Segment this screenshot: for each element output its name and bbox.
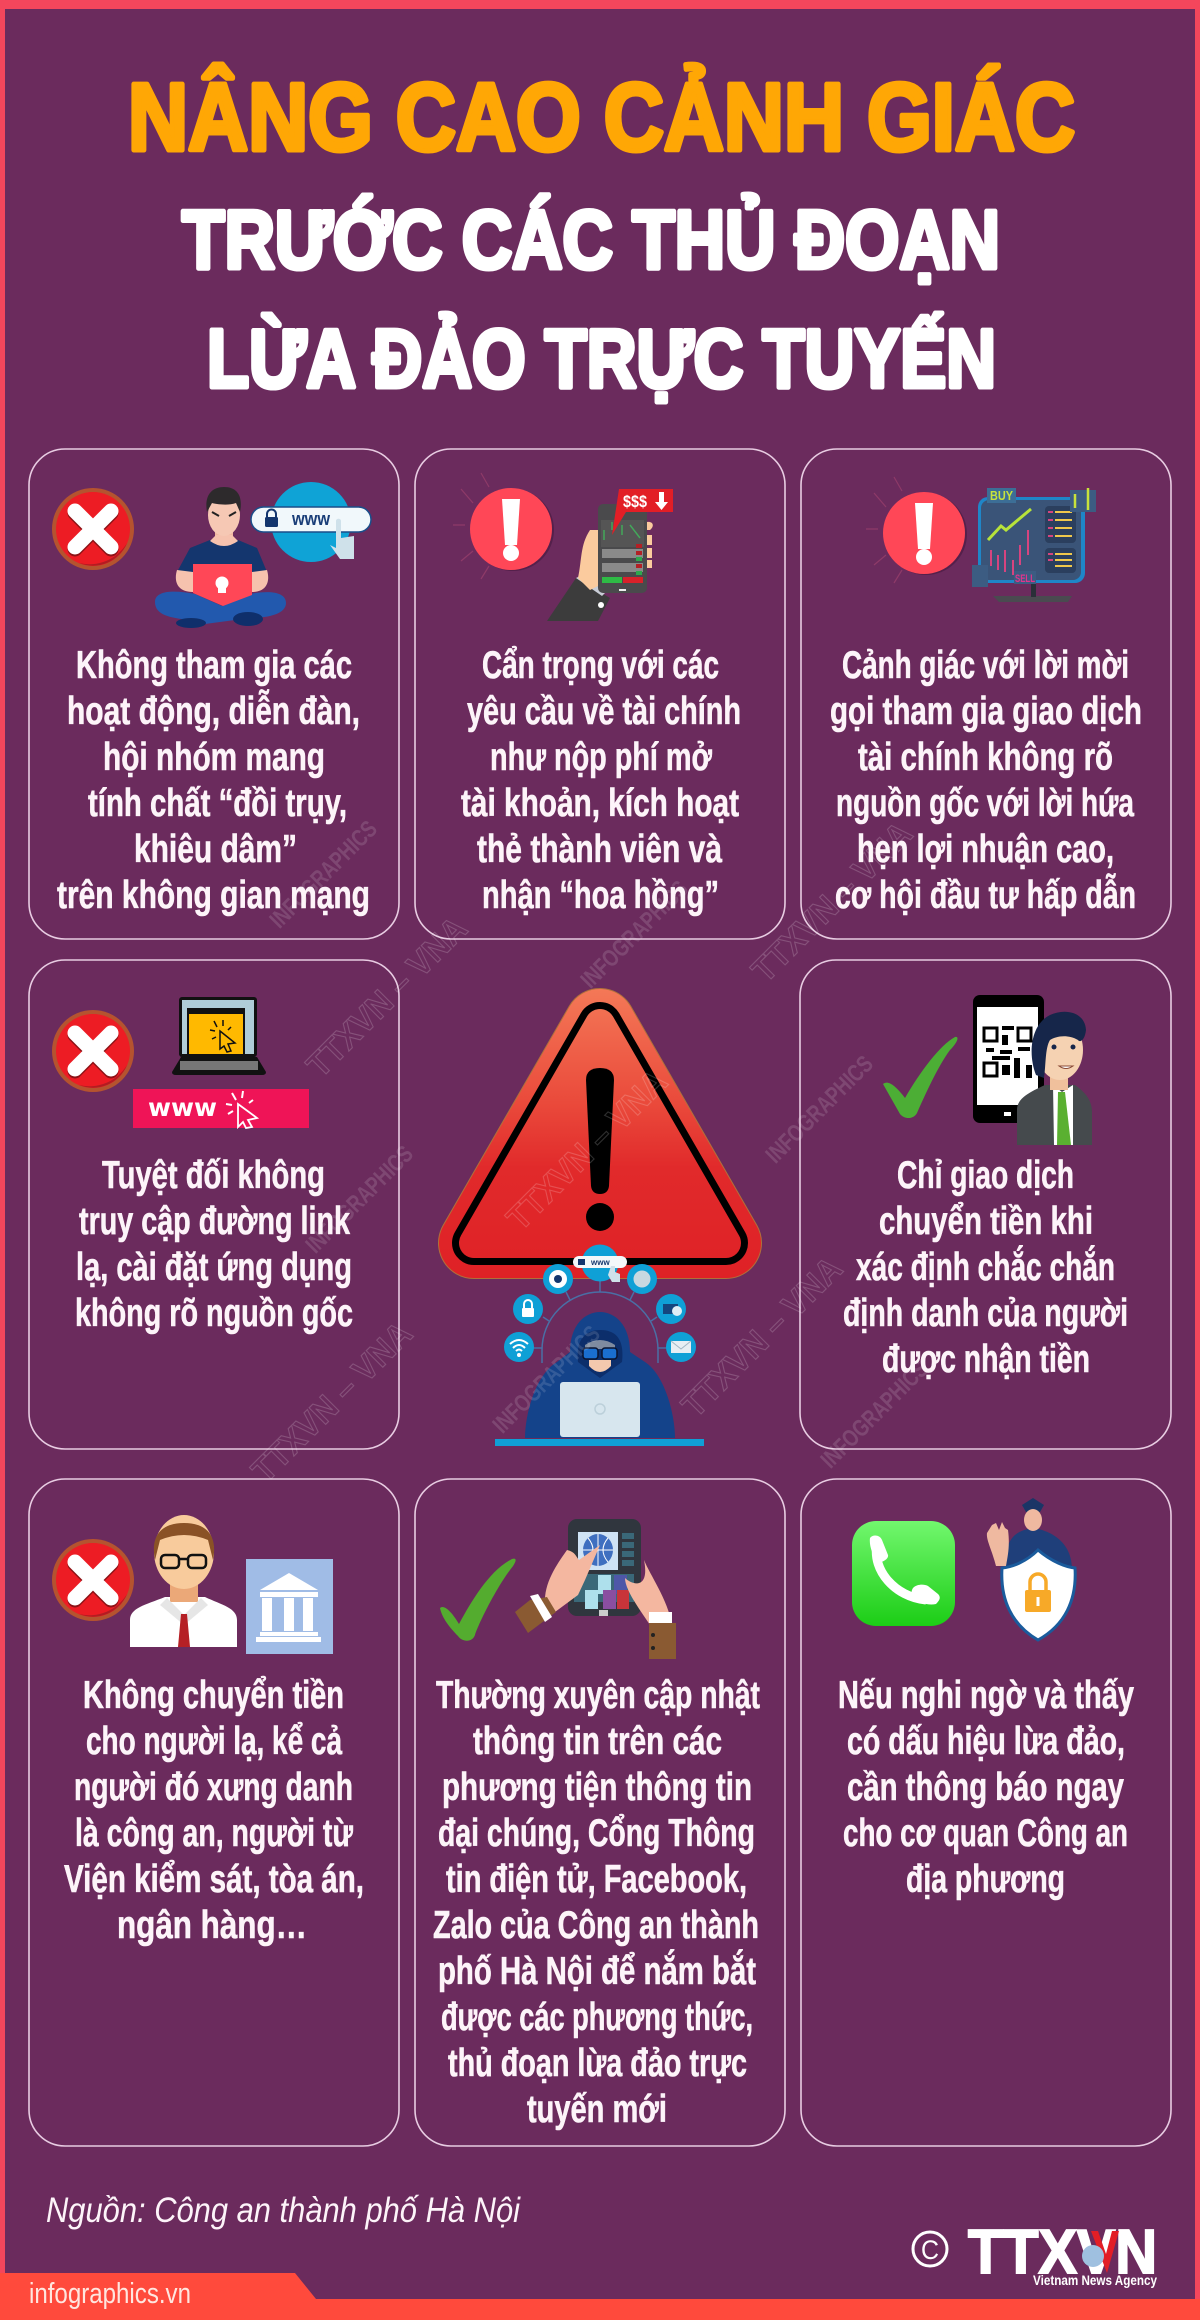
text [830, 644, 1142, 917]
panel: do not join adult forums [29, 449, 399, 939]
icon: globe with www address bar: www [291, 509, 331, 529]
panel: no transfers to strangers [29, 1479, 399, 2146]
text [75, 1154, 353, 1335]
logo: TTXVN: C [921, 2235, 939, 2265]
watermarks: INFOGRAPHICS [761, 1051, 879, 1169]
icon: trading monitor: BUY [990, 488, 1013, 503]
panel: verify recipient [800, 960, 1171, 1449]
text [64, 1674, 364, 1947]
text: hoạt động, diễn đàn, [67, 689, 360, 733]
icon: trading monitor: SELL [1015, 573, 1035, 585]
icon: red cross [52, 488, 134, 570]
icon: green check [440, 1559, 516, 1641]
icon: www link button [133, 1089, 309, 1128]
watermarks [245, 815, 934, 1490]
text: chuyển tiền khi [879, 1200, 1093, 1243]
text: phương tiện thông tin [442, 1766, 752, 1809]
icon: hand holding phone with falling price: $$$ [623, 492, 647, 511]
icon: warning exclamation [453, 473, 554, 579]
text: Cẩn trọng với các [482, 644, 719, 687]
text: truy cập đường link [79, 1200, 350, 1243]
icon: warning triangle [474, 1024, 726, 1243]
title: TRƯỚC CÁC THỦ ĐOẠN [182, 193, 1000, 286]
icon: hacker user with laptop [155, 487, 286, 628]
text: hội nhóm mang [103, 736, 325, 779]
text: Viện kiểm sát, tòa án, [64, 1858, 364, 1901]
icon: police officer with shield [987, 1498, 1075, 1640]
icon: phone with QR code [973, 995, 1044, 1123]
text: thẻ thành viên và [477, 828, 722, 871]
text: cho người lạ, kể cả [86, 1720, 342, 1763]
text [57, 644, 370, 917]
watermarks: INFOGRAPHICS [301, 1141, 419, 1259]
panel: strange links [29, 960, 399, 1449]
text: tài khoản, kích hoạt [461, 782, 739, 825]
text: đại chúng, Cổng Thông [438, 1812, 755, 1855]
icon: man with glasses [130, 1515, 237, 1647]
text: trên không gian mạng [57, 874, 370, 917]
icon: green check [883, 1037, 957, 1118]
text: Zalo của Công an thành [433, 1904, 759, 1947]
icon: hand holding phone with falling price [547, 489, 673, 621]
icon: laptop with cursor [172, 997, 266, 1075]
watermarks: TTXVN – VNA [300, 910, 475, 1085]
source note: Nguồn: Công an thành phố Hà Nội [46, 2191, 521, 2230]
text: không rõ nguồn gốc [75, 1292, 353, 1335]
text: được các phương thức, [441, 1996, 753, 2039]
text: Thường xuyên cập nhật [436, 1674, 760, 1717]
text: người đó xưng danh [74, 1766, 353, 1809]
icon: globe with www address bar [251, 482, 371, 562]
watermarks: TTXVN – VNA [245, 1315, 420, 1490]
watermarks: INFOGRAPHICS [576, 876, 694, 994]
watermarks: TTXVN – VNA [500, 1063, 675, 1238]
text: khiêu dâm” [134, 828, 297, 871]
logo: TTXVN: TTXVN [968, 2218, 1157, 2287]
logo: TTXVN: Vietnam News Agency [1033, 2272, 1157, 2288]
panel: investment offers [801, 449, 1171, 939]
icon: red cross [52, 1010, 134, 1092]
text: Không tham gia các [76, 644, 352, 687]
icon: businessman [1017, 1012, 1092, 1145]
text [461, 644, 741, 917]
text: là công an, người từ [75, 1812, 354, 1855]
text: tài chính không rõ [858, 736, 1113, 779]
icon: hacker network: www [590, 1258, 610, 1267]
text: tính chất “đồi trụy, [88, 782, 347, 825]
text: tin điện tử, Facebook, [446, 1858, 747, 1901]
text: phố Hà Nội để nắm bắt [438, 1949, 756, 1993]
title: NÂNG CAO CẢNH GIÁC [128, 63, 1075, 171]
text: lạ, cài đặt ứng dụng [76, 1246, 352, 1289]
panel: report to police [801, 1479, 1171, 2146]
central warning illustration [474, 1024, 726, 1446]
watermarks: TTXVN – VNA [745, 815, 920, 990]
text: ngân hàng… [117, 1904, 307, 1947]
watermarks: TTXVN – VNA [675, 1250, 850, 1425]
icon: hacker network [495, 1244, 704, 1446]
site url: infographics.vn [29, 2278, 191, 2310]
panel: keep updated [415, 1479, 785, 2146]
text: Tuyệt đối không [102, 1154, 325, 1197]
icon: warning exclamation [866, 477, 967, 583]
watermarks: INFOGRAPHICS [265, 816, 383, 934]
text: thông tin trên các [473, 1720, 722, 1763]
watermarks: INFOGRAPHICS [816, 1356, 934, 1474]
icon: www link button: www [148, 1093, 217, 1122]
panel: financial requests [415, 449, 785, 939]
text: yêu cầu về tài chính [467, 690, 741, 733]
text: địa phương [906, 1858, 1065, 1901]
text: thủ đoạn lừa đảo trực [448, 2042, 747, 2085]
text: tuyến mới [527, 2088, 667, 2131]
text: Không chuyển tiền [83, 1674, 344, 1717]
text [838, 1674, 1134, 1901]
watermarks: INFOGRAPHICS [488, 1321, 606, 1439]
title: LỪA ĐẢO TRỰC TUYẾN [207, 311, 996, 405]
text: Chỉ giao dịch [897, 1154, 1074, 1197]
text [843, 1154, 1128, 1381]
text: được nhận tiền [882, 1338, 1090, 1381]
title [128, 63, 1075, 405]
icon: bank [246, 1559, 333, 1654]
icon: phone app [852, 1521, 955, 1626]
text: nhận “hoa hồng” [482, 874, 719, 917]
icon: red cross [52, 1539, 134, 1621]
text [433, 1674, 760, 2131]
icon: trading monitor [972, 488, 1096, 602]
text: như nộp phí mở [490, 736, 712, 779]
text: hẹn lợi nhuận cao, [857, 828, 1114, 871]
icon: hands on tablet [515, 1519, 676, 1659]
